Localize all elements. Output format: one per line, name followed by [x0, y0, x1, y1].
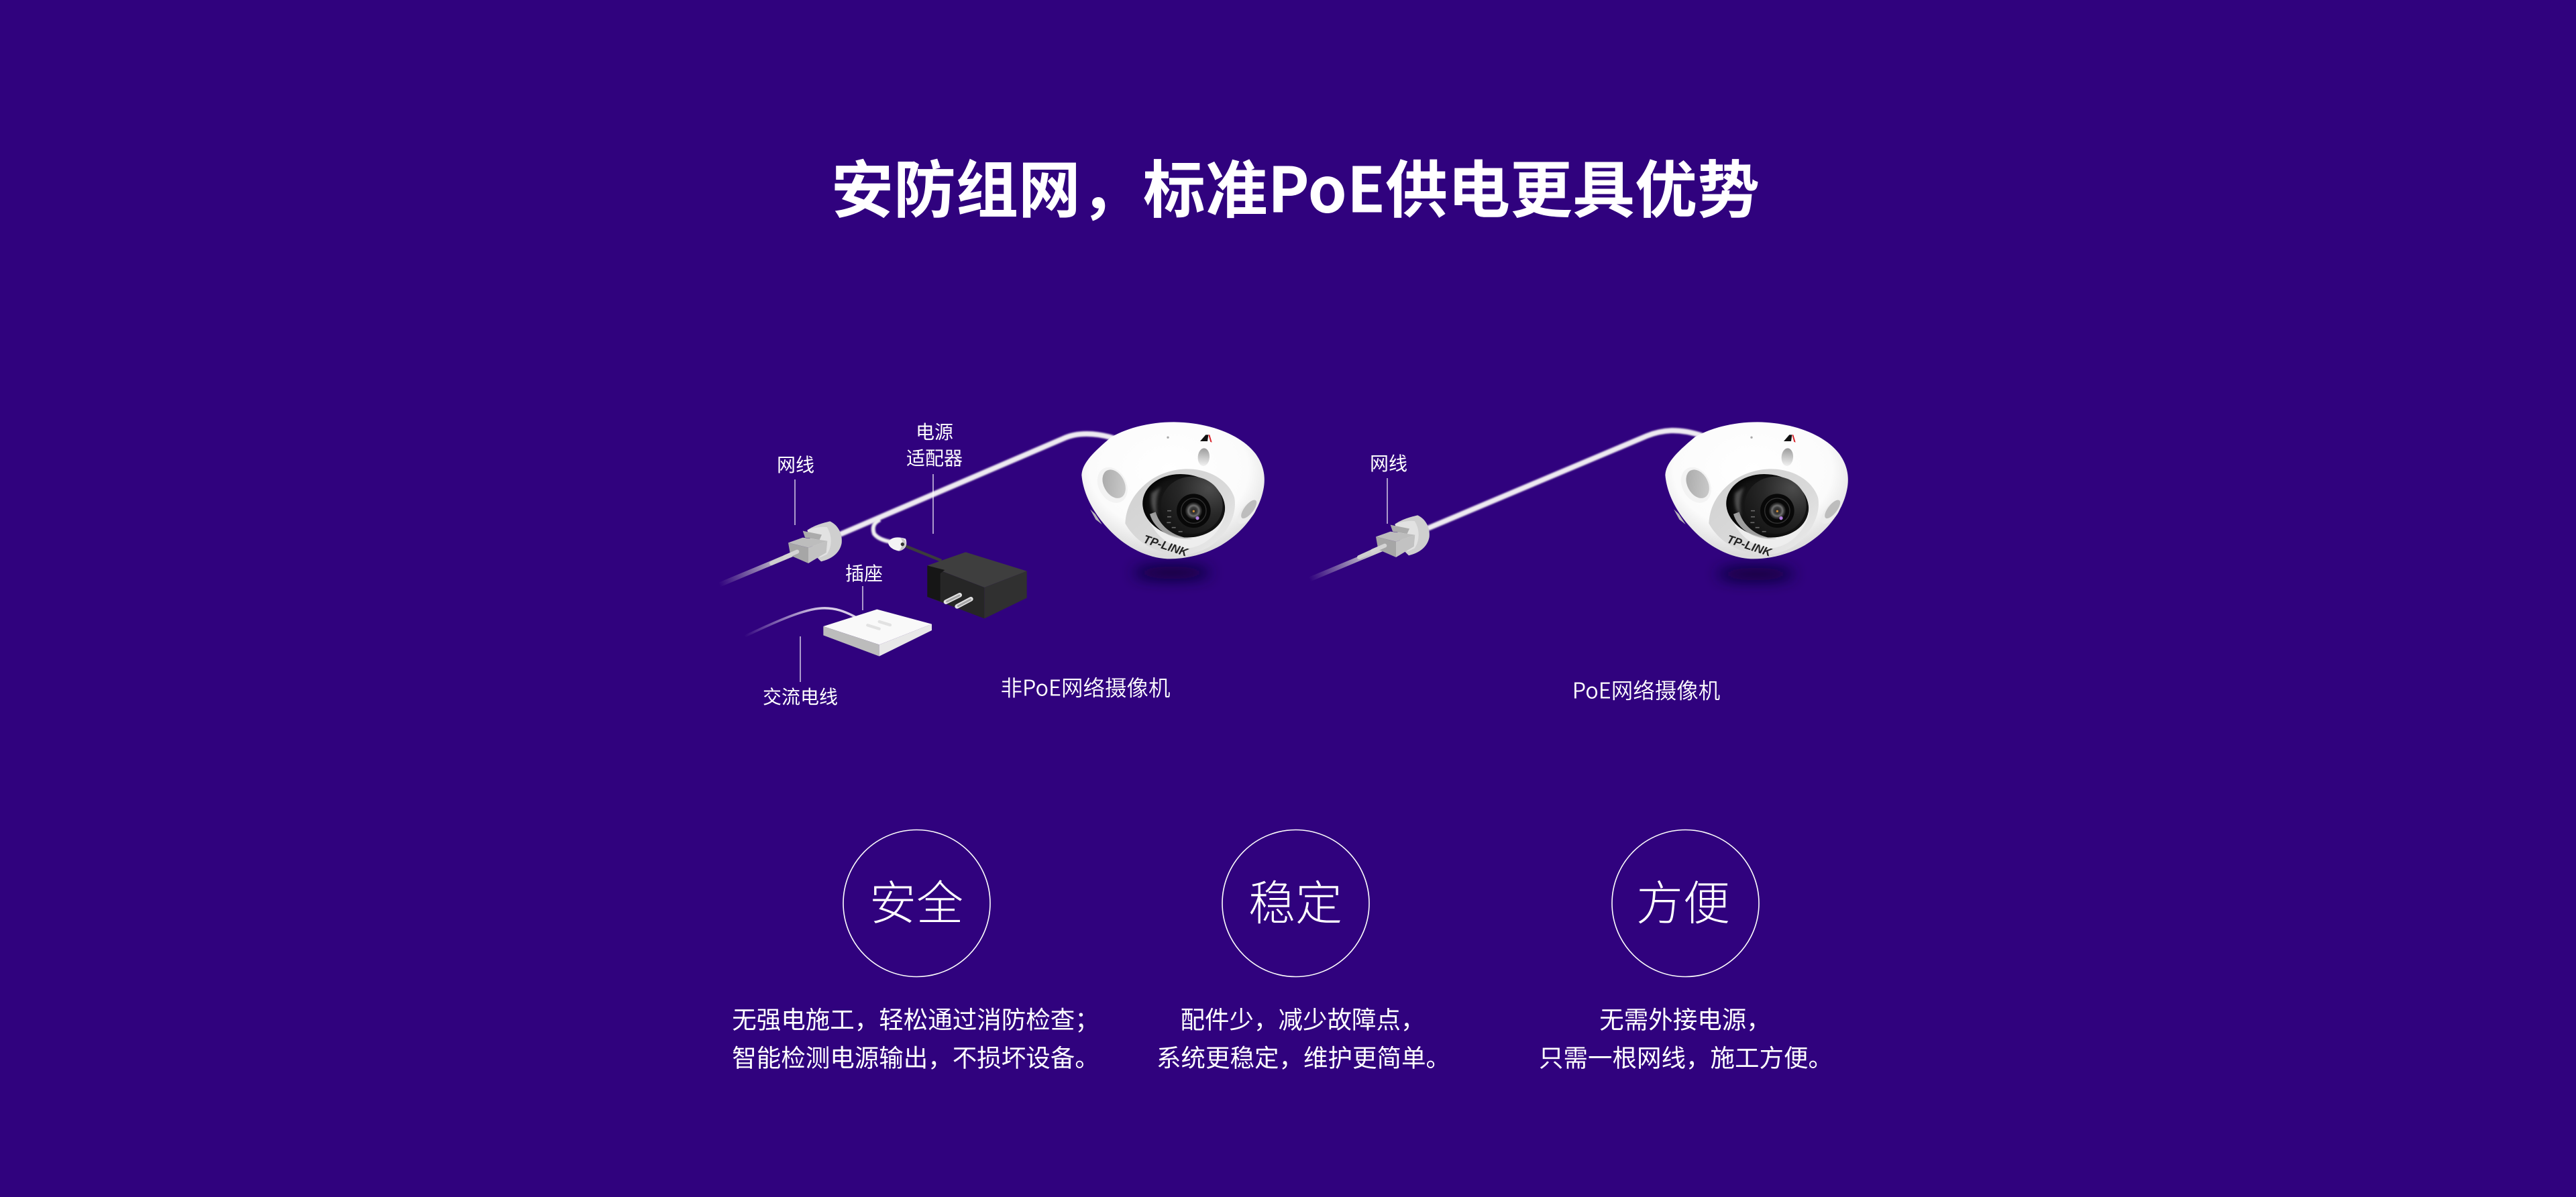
description: safety: 智能检测电源输出，不损坏设备。	[732, 1038, 1099, 1074]
power branch cable	[873, 520, 891, 542]
label: power adapter: 适配器	[906, 444, 963, 471]
label: socket	[845, 559, 883, 610]
label: AC wire	[763, 636, 838, 709]
badge: convenience: 方便	[1636, 866, 1730, 933]
camera shadow	[1133, 566, 1211, 579]
description: safety	[732, 1001, 1099, 1074]
description: convenience: 只需一根网线，施工方便。	[1539, 1038, 1833, 1074]
power connector	[888, 537, 941, 561]
wall socket	[823, 610, 932, 657]
ethernet plug	[1359, 515, 1430, 557]
panel: non-PoE camera diagram	[718, 418, 1265, 709]
label: power adapter: 电源	[916, 418, 953, 445]
panel: PoE camera diagram	[1309, 422, 1848, 705]
label: network cable	[777, 451, 814, 525]
title: 安防组网，标准PoE供电更具优势	[831, 139, 1760, 231]
label: power adapter	[906, 418, 963, 534]
label: network cable: 网线	[777, 451, 814, 477]
panel: stability	[1157, 830, 1450, 1074]
description: safety: 无强电施工，轻松通过消防检查；	[732, 1001, 1099, 1035]
ethernet plug	[771, 521, 842, 563]
camera	[1081, 422, 1265, 559]
brand mark: TP-LINK	[1725, 532, 1774, 559]
description: convenience: 无需外接电源，	[1599, 1001, 1771, 1035]
label: AC wire: 交流电线	[763, 683, 838, 709]
badge: safety: 安全	[869, 866, 963, 933]
description: convenience	[1539, 1001, 1833, 1074]
power adapter	[927, 552, 1027, 618]
label: socket: 插座	[845, 559, 883, 586]
caption: non-PoE camera: 非PoE网络摄像机	[1000, 671, 1171, 703]
network cable	[718, 434, 1115, 585]
camera shadow	[1717, 567, 1794, 581]
label: network cable	[1370, 449, 1407, 524]
badge: stability: 稳定	[1248, 866, 1342, 933]
AC cord	[743, 608, 855, 637]
network cable	[1309, 431, 1703, 579]
caption: PoE camera: PoE网络摄像机	[1572, 673, 1720, 705]
badge: convenience	[1612, 830, 1759, 976]
panel: convenience	[1539, 830, 1833, 1074]
label: network cable: 网线	[1370, 449, 1407, 476]
panel: safety	[732, 830, 1099, 1074]
description: stability	[1157, 1001, 1450, 1074]
camera	[1665, 422, 1848, 559]
description: stability: 配件少，减少故障点，	[1181, 1001, 1425, 1035]
brand mark: TP-LINK	[1142, 532, 1191, 559]
badge: stability	[1222, 830, 1369, 976]
badge: safety	[843, 830, 990, 976]
description: stability: 系统更稳定，维护更简单。	[1157, 1038, 1450, 1074]
